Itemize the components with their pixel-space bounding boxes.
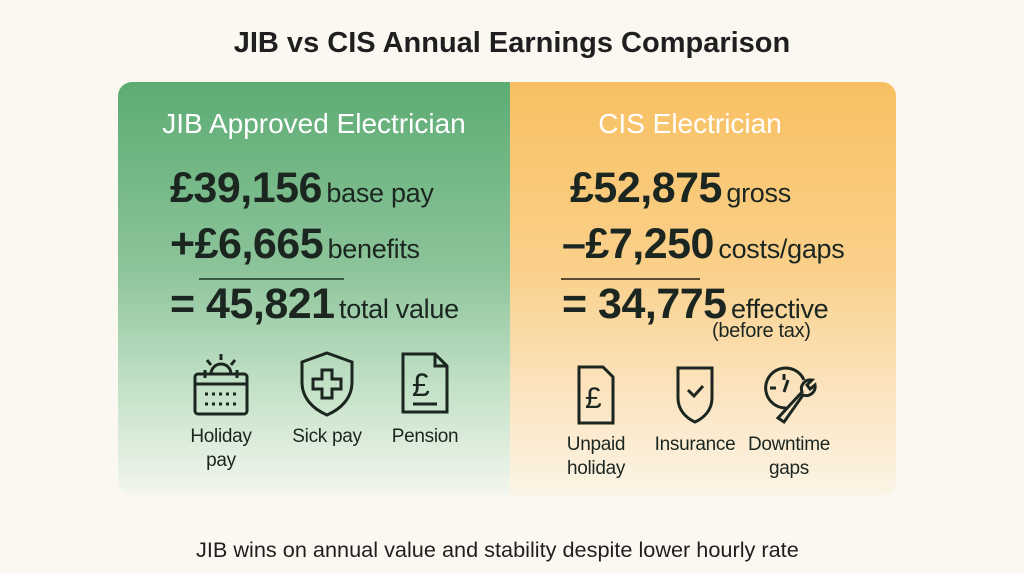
icon: holiday pay: Holiday xyxy=(190,426,252,447)
icon: sick pay xyxy=(292,351,362,447)
icon: unpaid holiday: £ xyxy=(585,382,602,415)
row: costs: –£7,250 costs/gaps xyxy=(562,220,844,268)
icon: holiday pay: pay xyxy=(206,450,236,471)
panel: CIS xyxy=(510,82,896,495)
icon: pension xyxy=(392,352,458,447)
row: benefits: +£6,665 benefits xyxy=(170,220,420,268)
icon: insurance xyxy=(655,366,735,455)
row: effective: = 34,775 effective xyxy=(562,280,828,328)
icon: unpaid holiday xyxy=(567,366,626,479)
icon: downtime xyxy=(748,366,830,479)
panel: JIB xyxy=(118,82,510,495)
icon: unpaid holiday: holiday xyxy=(567,458,625,479)
title: JIB vs CIS Annual Earnings Comparison xyxy=(234,27,790,59)
icon: holiday pay xyxy=(190,354,252,471)
row: total: = 45,821 total value xyxy=(170,280,459,328)
icon: unpaid holiday: Unpaid xyxy=(567,434,625,455)
row: gross: £52,875 gross xyxy=(570,164,791,212)
icon: downtime: gaps xyxy=(769,458,809,479)
note: before tax: (before tax) xyxy=(712,320,811,342)
heading: JIB: JIB Approved Electrician xyxy=(162,108,466,139)
icon: insurance: Insurance xyxy=(655,434,735,455)
row: base pay: £39,156 base pay xyxy=(170,164,434,212)
icon: pension: £ xyxy=(412,367,430,403)
icon: sick pay: Sick pay xyxy=(292,426,362,447)
heading: CIS: CIS Electrician xyxy=(598,108,782,139)
icon: downtime: Downtime xyxy=(748,434,830,455)
icon: pension: Pension xyxy=(392,426,458,447)
footer caption: JIB wins on annual value and stability despite lower hourly rate xyxy=(196,537,799,562)
